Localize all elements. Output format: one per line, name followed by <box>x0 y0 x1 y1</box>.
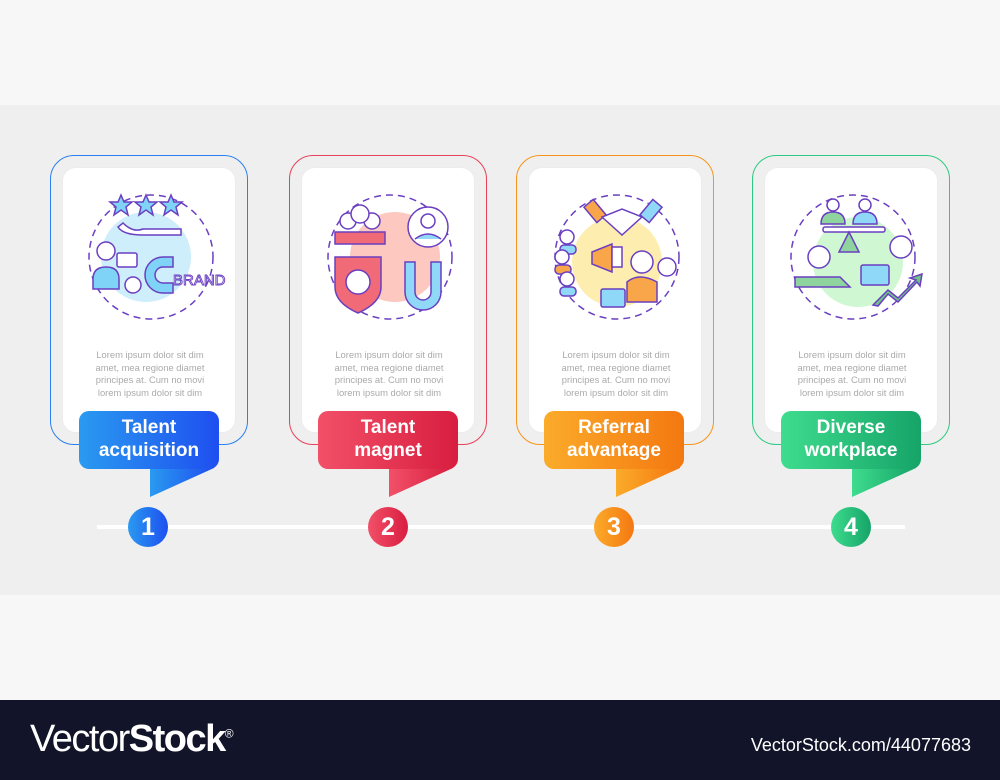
text block: Lorem ipsum dolor sit dim <box>96 349 204 360</box>
text block: Lorem ipsum dolor sit dim <box>335 349 443 360</box>
text: workplace <box>805 440 897 461</box>
icon: referral <box>554 194 680 320</box>
text block: amet, mea regione diamet <box>562 362 670 372</box>
icon: talent magnet <box>327 194 453 320</box>
step number 1 <box>128 507 168 547</box>
text block: amet, mea regione diamet <box>96 362 204 372</box>
text block: principes at. Cum no movi <box>562 374 670 385</box>
text: Diverse <box>817 417 885 438</box>
text block: principes at. Cum no movi <box>96 374 204 385</box>
step number 1: 1 <box>141 513 155 541</box>
panel: talent magnet <box>289 155 487 445</box>
panel: diverse workplace <box>752 155 950 445</box>
icon: diversity <box>790 194 923 320</box>
text block: lorem ipsum dolor sit dim <box>337 386 441 398</box>
panel: talent acquisition <box>50 155 248 445</box>
text: Referral <box>578 417 650 438</box>
step number 4: 4 <box>844 513 858 541</box>
footer <box>0 700 1000 780</box>
text: Talent <box>122 417 176 438</box>
text block: lorem ipsum dolor sit dim <box>98 386 202 398</box>
label: talent magnet <box>318 411 458 497</box>
step number 2 <box>368 507 408 547</box>
text block: Lorem ipsum dolor sit dim <box>562 349 670 360</box>
text block <box>334 349 444 398</box>
text block <box>562 349 670 398</box>
text: magnet <box>354 440 422 461</box>
text block: amet, mea regione diamet <box>798 362 906 372</box>
label: talent acquisition <box>79 411 219 497</box>
step number 3: 3 <box>607 513 621 541</box>
step number 4 <box>831 507 871 547</box>
logo text: VectorStock® <box>30 718 232 760</box>
text: advantage <box>567 440 661 461</box>
label: referral advantage <box>544 411 684 497</box>
panel: referral advantage <box>516 155 714 445</box>
text: Talent <box>361 417 415 438</box>
icon: brand magnet <box>88 193 226 320</box>
text block: lorem ipsum dolor sit dim <box>800 386 904 398</box>
step number 3 <box>594 507 634 547</box>
text block <box>798 349 906 398</box>
text block: principes at. Cum no movi <box>335 374 443 385</box>
text: acquisition <box>99 440 199 461</box>
text block: principes at. Cum no movi <box>798 374 906 385</box>
icon: brand magnet: BRAND <box>173 272 226 289</box>
text block: amet, mea regione diamet <box>335 362 443 372</box>
step number 2: 2 <box>381 513 395 541</box>
text block <box>96 349 204 398</box>
label: diverse workplace <box>781 411 921 497</box>
url: VectorStock.com/44077683 <box>751 735 971 755</box>
text block: lorem ipsum dolor sit dim <box>564 386 668 398</box>
text block: Lorem ipsum dolor sit dim <box>798 349 906 360</box>
